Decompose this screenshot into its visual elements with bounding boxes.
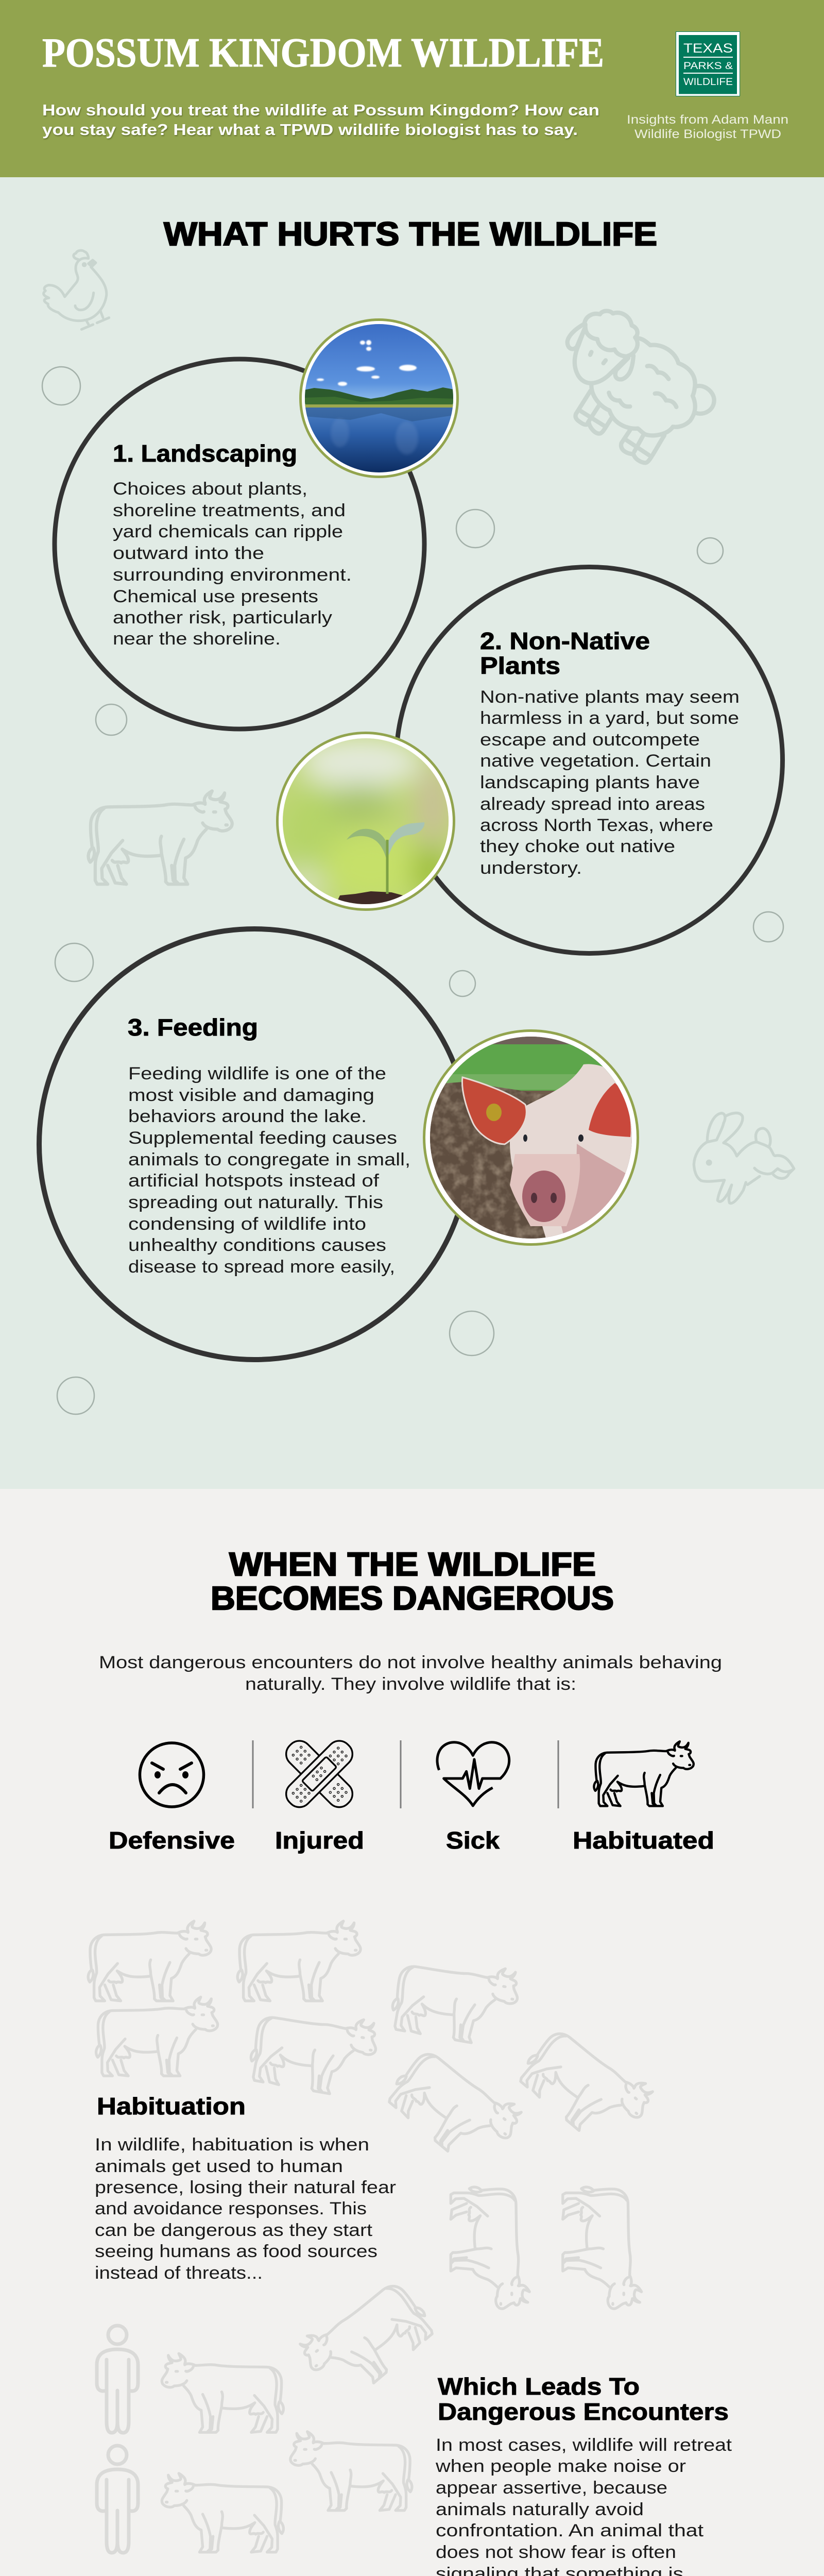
logo: Texas Parks & Wildlife: TEXAS [683,41,733,56]
paragraph: appear assertive, because [436,2478,667,2498]
subtitle: How should you treat the wildlife at Possum Kingdom? How can [42,101,599,119]
divider [557,1740,559,1808]
paragraph: animals to congregate in small, [128,1150,410,1170]
paragraph: they choke out native [480,837,675,856]
paragraph: outward into the [113,544,264,563]
heading: 3. Feeding [128,1014,258,1041]
intro text: naturally. They involve wildlife that is: [245,1674,576,1694]
divider [400,1740,402,1808]
paragraph: confrontation. An animal that [436,2521,704,2540]
decorative bubbles [42,367,783,1414]
paragraph: Non-native plants may seem [480,687,740,707]
icon: angry face [140,1743,204,1807]
paragraph: already spread into areas [480,794,705,814]
text: dangerous encounters [435,2373,732,2576]
labels: Injured [275,1827,364,1854]
attribution: Insights from Adam Mann [627,113,788,127]
heading: 1. Landscaping [113,440,297,467]
paragraph: harmless in a yard, but some [480,708,739,728]
icon: cow [89,791,232,884]
paragraph: condensing of wildlife into [128,1214,366,1234]
heading: WHAT HURTS THE WILDLIFE [164,215,657,252]
intro text [99,1653,722,1694]
icon: heartbeat [437,1742,509,1806]
ring: feeding [39,929,470,1360]
logo: Texas Parks & Wildlife: PARKS & [683,61,733,72]
paragraph: disease to spread more easily, [128,1257,395,1277]
paragraph: escape and outcompete [480,730,700,750]
paragraph: seeing humans as food sources [95,2242,377,2261]
paragraph: artificial hotspots instead of [128,1171,380,1191]
paragraph: Supplemental feeding causes [128,1128,397,1148]
text: habituation [95,2093,396,2283]
herd of cows illustration [88,1921,659,2553]
paragraph: does not show fear is often [436,2543,676,2562]
paragraph: spreading out naturally. This [128,1193,383,1212]
heading: BECOMES DANGEROUS [211,1580,614,1617]
photo: pig [424,1030,639,1247]
paragraph: across North Texas, where [480,816,713,835]
heading: Habituation [97,2093,246,2120]
heading [480,628,650,679]
icon: crossed bandages [281,1736,357,1812]
intro text: Most dangerous encounters do not involve healthy animals behaving [99,1653,722,1672]
paragraph: when people make noise or [435,2456,686,2476]
heading: WHEN THE WILDLIFE [229,1546,596,1583]
paragraph: Choices about plants, [113,479,307,499]
paragraph: Chemical use presents [113,587,318,606]
heading: 2. Non-Native [480,628,650,654]
text: feeding [128,1014,410,1277]
logo: Texas Parks & Wildlife [676,32,740,96]
icon: cow [594,1741,694,1806]
paragraph: understory. [480,858,582,878]
paragraph: landscaping plants have [480,773,700,792]
heading: Dangerous Encounters [438,2398,729,2425]
paragraph: can be dangerous as they start [95,2221,373,2240]
photo: lake [301,319,457,477]
paragraph [113,479,352,649]
text: non-native plants [480,628,740,878]
labels: Sick [446,1827,500,1854]
heading [211,1546,614,1617]
attribution: Wildlife Biologist TPWD [634,127,781,141]
paragraph: native vegetation. Certain [480,751,711,771]
paragraph: Feeding wildlife is one of the [128,1064,386,1083]
panel: what hurts the wildlife [37,222,795,1415]
icon: chicken [44,250,109,329]
ring: landscaping [55,359,424,729]
paragraph [128,1064,410,1277]
ring: non-native plants [397,567,783,953]
header panel [0,0,824,177]
paragraph: In most cases, wildlife will retreat [436,2435,732,2455]
title: POSSUM KINGDOM WILDLIFE [42,29,604,76]
paragraph: near the shoreline. [113,629,281,649]
labels: Defensive [109,1827,235,1854]
paragraph [435,2435,732,2576]
subtitle [42,101,599,139]
paragraph: most visible and damaging [128,1086,374,1105]
paragraph: another risk, particularly [113,608,332,628]
icon: rabbit [694,1113,794,1204]
labels: Habituated [573,1827,714,1854]
labels [109,1827,714,1854]
heading: Which Leads To [438,2373,640,2400]
paragraph [480,687,740,878]
paragraph: behaviors around the lake. [128,1107,367,1126]
paragraph: animals naturally avoid [436,2500,644,2519]
paragraph: In wildlife, habituation is when [95,2135,369,2155]
paragraph: yard chemicals can ripple [113,522,343,541]
paragraph: shoreline treatments, and [113,501,346,520]
panel: when the wildlife becomes dangerous [0,1489,824,2576]
divider [252,1740,253,1808]
paragraph: animals get used to human [95,2157,343,2176]
heading [438,2373,729,2425]
heading: Plants [480,652,560,679]
text: landscaping [113,440,352,649]
subtitle: you stay safe? Hear what a TPWD wildlife biologist has to say. [42,121,578,139]
paragraph: presence, losing their natural fear [95,2178,396,2197]
icon: sheep [568,311,714,463]
paragraph: surrounding environment. [113,565,352,585]
paragraph [95,2135,396,2283]
attribution [627,113,788,141]
paragraph: and avoidance responses. This [95,2199,367,2218]
photo: sprout [277,733,454,910]
paragraph: instead of threats... [95,2263,263,2283]
paragraph: unhealthy conditions causes [128,1235,386,1255]
logo: Texas Parks & Wildlife: WILDLIFE [683,77,733,88]
